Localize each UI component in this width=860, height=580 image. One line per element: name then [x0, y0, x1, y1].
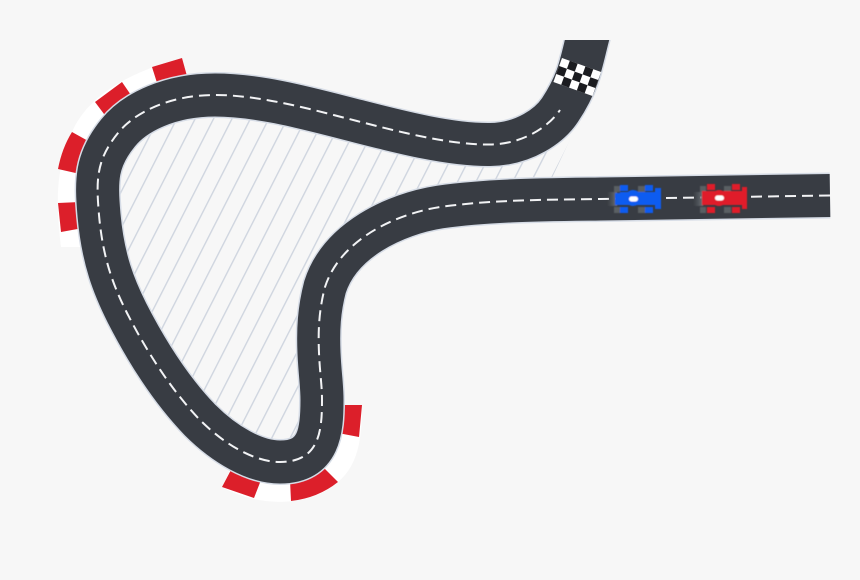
finish line checker	[553, 58, 601, 96]
mask above road top	[555, 0, 625, 40]
centre dashes	[98, 95, 830, 462]
hatched infield	[98, 95, 575, 462]
curb: bottom	[222, 405, 362, 502]
road	[98, 5, 830, 462]
curb: top left	[58, 58, 190, 247]
car: blue	[607, 185, 661, 213]
car: red	[693, 184, 747, 213]
